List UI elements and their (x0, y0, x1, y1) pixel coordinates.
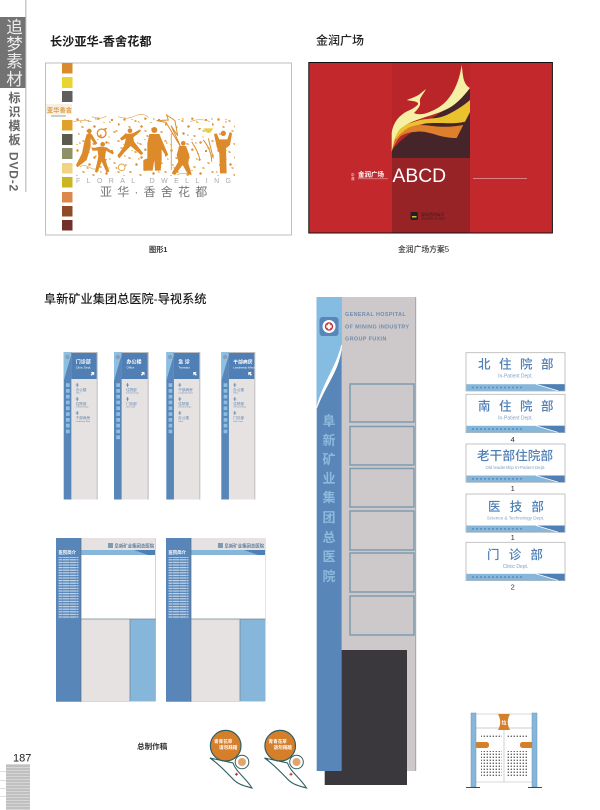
tall hospital totem (317, 297, 416, 785)
door plate: senior ward: 老干部住院部 (477, 448, 553, 463)
maker logo (410, 212, 445, 221)
small logo thumbnail: 亚华香舍 (47, 106, 72, 114)
door plate: south ward (466, 394, 565, 433)
sidebar: DVD label: 素 (6, 52, 23, 71)
sidebar: DVD label: 材 (6, 70, 23, 89)
English hospital name (345, 312, 410, 342)
information board 2: 阜新矿业集团总医院 (224, 542, 265, 549)
door plate: clinic: Clinic Dept. (503, 564, 528, 570)
plaza logotype: 中 (351, 172, 355, 177)
small directory pillar: leadership ward: 办公楼 (233, 387, 244, 392)
small directory pillar: clinic: 门诊部 (76, 358, 91, 366)
central band (392, 63, 470, 158)
panel: Jinrun Plaza red signage (309, 62, 552, 233)
small directory pillar: office: 住院部 (126, 387, 137, 392)
English hospital name: OF MINING INDUSTRY (345, 324, 410, 330)
vertical Chinese name: 总 (322, 530, 336, 545)
totem body (342, 297, 416, 771)
orange top badge (498, 714, 510, 730)
colour swatches (62, 63, 72, 230)
door plate: north ward (466, 353, 565, 391)
small directory pillar: leadership ward: Clinic Dept. (233, 420, 243, 423)
sidebar: DVD label: DVD-2 (6, 152, 20, 192)
panel: floral dwelling logo board (46, 63, 292, 235)
lawn sign 2: 请勿践踏 (274, 744, 292, 751)
hospital emblem (320, 317, 338, 336)
caption: figure 1: 图形1 (149, 245, 167, 254)
floral dwelling wordmark: FLORAL DWELLING (76, 178, 231, 185)
orange side tags (475, 742, 489, 748)
small directory pillar: emergency: Office (178, 421, 183, 423)
information board 1 (56, 538, 156, 702)
page number: 187 (13, 752, 31, 764)
door plate: senior ward (466, 444, 565, 482)
blue strip (317, 297, 342, 771)
small directory pillar: leadership ward (221, 352, 255, 500)
small directory pillar: clinic: Leadership Ward (76, 420, 90, 423)
small directory pillar: office: Clinic Dept. (126, 406, 136, 409)
maker logo: SHENZHEN XILI SIGN (421, 219, 445, 221)
small directory pillar: emergency: 办公楼 (178, 415, 189, 420)
small directory pillar: emergency: 住院部 (178, 401, 189, 406)
sidebar: DVD label: 识 (8, 105, 21, 119)
ABCD wordmark: ABCD (392, 166, 446, 187)
small directory pillar: clinic: Office (76, 393, 81, 395)
door plate: science and technology: Science & Technology Dept. (487, 516, 544, 520)
vertical Chinese name (322, 414, 336, 584)
small directory pillar: leadership ward: 干部病房 (233, 358, 253, 366)
door plate: north ward: 北住院部 (478, 357, 562, 372)
lawn sign 2 (264, 730, 306, 788)
door plate: south ward: 南住院部 (478, 398, 562, 413)
small directory pillar: clinic: 住院部 (76, 401, 87, 406)
small directory pillar: leadership ward: Leadership Ward (233, 366, 255, 370)
vertical Chinese name: 新 (322, 433, 336, 448)
sidebar: DVD label (0, 0, 26, 192)
small directory pillar: office: 办公楼 (126, 358, 142, 366)
Chinese wordmark: 亚华·香舍花都 (100, 184, 212, 199)
information board 2: 医院简介 (168, 549, 187, 556)
heading: Changsha Yahua: 长沙亚华-香舍花都 (50, 34, 152, 48)
small directory pillar: emergency: In-Patient Dept. (178, 406, 192, 409)
plaza logotype: 濠 (351, 176, 355, 181)
posts (471, 713, 476, 787)
directory panels (350, 384, 414, 635)
door plate: science and technology (466, 494, 565, 532)
quantity label 1: 1 (511, 484, 515, 493)
quantity label 2: 2 (511, 582, 515, 592)
quantity label 1: 1 (511, 533, 515, 542)
vertical Chinese name: 业 (322, 471, 336, 486)
small directory pillar: emergency (166, 352, 200, 500)
door plate: clinic: 门诊部 (487, 547, 552, 562)
plaza logotype: 金润广场 (358, 170, 384, 178)
small directory pillar: leadership ward: 门诊部 (233, 415, 244, 420)
vertical Chinese name: 团 (322, 510, 336, 525)
door plate: science and technology: 医技部 (488, 499, 553, 514)
dark base shadow (325, 650, 407, 785)
small directory pillar: clinic: Clinic Dept. (76, 366, 91, 370)
small directory pillar: office: Office (126, 366, 135, 370)
small directory pillar: leadership ward: 住院部 (233, 401, 244, 406)
English hospital name: GROUP FUXIN (345, 336, 387, 342)
waste bin: 垃 (501, 720, 507, 726)
small directory pillar: leadership ward: In-Patient Dept. (233, 406, 247, 409)
caption: overall draft: 总制作稿 (137, 741, 168, 751)
heading: Jinrun Plaza: 金润广场 (316, 32, 364, 48)
heading: Fuxin hospital wayfinding: 阜新矿业集团总医院-导视系统 (44, 291, 206, 306)
lawn sign 2: 青青花草 (268, 738, 287, 745)
small directory pillar: emergency: Leadership Ward (178, 392, 193, 395)
small directory pillar: office (114, 352, 149, 500)
information board 2 (166, 538, 266, 702)
sidebar: DVD label: 板 (8, 132, 21, 147)
page stripes block (0, 764, 30, 810)
small directory pillar: leadership ward: Office (233, 393, 238, 395)
vertical Chinese name: 矿 (322, 452, 336, 467)
small directory pillar: office: 门诊部 (126, 401, 137, 406)
lawn sign 1 (210, 730, 252, 788)
caption: plaza scheme 5: 金润广场方案5 (398, 244, 450, 254)
sidebar: DVD label: 追 (6, 18, 23, 37)
quantity label 4: 4 (511, 435, 515, 444)
sidebar: DVD label: 模 (8, 118, 21, 133)
plaza logotype (351, 170, 388, 181)
small directory pillar: emergency: 干部病房 (178, 387, 193, 392)
door plate: north ward: In-Patient Dept. (498, 374, 533, 380)
door plate: south ward: In-Patient Dept. (498, 415, 533, 421)
sidebar: DVD label: 标 (8, 90, 21, 105)
information board 1: 医院简介 (58, 549, 77, 556)
vertical Chinese name: 医 (322, 549, 336, 564)
door plate: senior ward: Old leadership In-Patient Dept. (485, 465, 546, 470)
small directory pillar: clinic: 干部病房 (76, 415, 90, 420)
small directory pillar: office: In-Patient Dept. (126, 392, 140, 395)
lawn sign 1: 请勿践踏 (219, 744, 238, 751)
small logo thumbnail (46, 104, 72, 116)
sidebar: DVD label: 梦 (6, 35, 23, 54)
right rule (473, 177, 527, 180)
small directory pillar: clinic: In-Patient Dept. (76, 406, 89, 409)
lawn sign 1: 青青花草 (214, 738, 233, 745)
English hospital name: GENERAL HOSPITAL (345, 312, 406, 318)
maker logo: 深圳西利标识 (421, 212, 444, 217)
information board 1: 阜新矿业集团总医院 (114, 542, 155, 549)
phoenix emblem (392, 65, 470, 158)
small directory pillar: emergency: Transact (178, 366, 190, 370)
door plate: clinic (466, 542, 565, 581)
small directory pillar: clinic: 办公楼 (76, 387, 87, 392)
waste bin (466, 713, 542, 788)
small directory pillar: emergency: 急 诊 (178, 358, 190, 366)
vertical Chinese name: 院 (322, 569, 336, 584)
vertical Chinese name: 集 (322, 490, 336, 505)
small directory pillar: clinic (64, 352, 98, 500)
floral dwelling artwork (73, 114, 235, 176)
vertical Chinese name: 阜 (322, 414, 336, 428)
